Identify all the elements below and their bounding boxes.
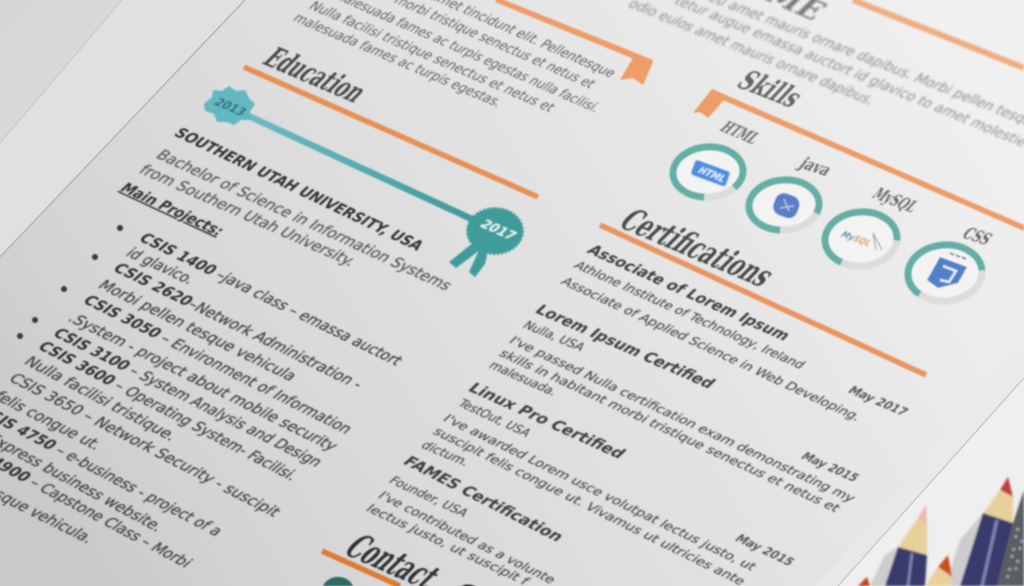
skill: HTML: HTML [715, 118, 764, 148]
badge: 2013 [204, 86, 255, 125]
pencil: orange tip [925, 555, 952, 586]
text: university block: Bachelor of Science in Information Systems [152, 147, 456, 294]
skill: HTML: HTML [695, 165, 729, 184]
text: project list: CSIS 3650 – Network Security - suscipit [5, 371, 285, 520]
text: project list: Morbi pellen tesque vehicula [94, 277, 301, 384]
text: intro paragraph: Nulla facilisi tristique senectus et netus et [305, 0, 559, 115]
text: university block: SOUTHERN UTAH UNIVERSITY, USA [170, 125, 428, 254]
text: fames entry [363, 453, 568, 586]
text: project list: CSIS 2620–Network Administration - [109, 260, 367, 392]
text: associate entry [558, 242, 912, 423]
heading: skills: Skills [729, 66, 810, 114]
text: fames entry: FAMES Certification [399, 453, 568, 545]
text: linux entry: suscipit felis congue ut. Vivamus ut ultricies ante [430, 425, 750, 586]
text: university block: Main Projects: [116, 180, 228, 239]
panel: contact [322, 528, 490, 586]
text: linux entry: I've awarded Lorem usce volutpat lectus justo, ut [440, 412, 761, 573]
skill: MySQL [823, 185, 923, 268]
text: linux entry: TestOut, USA [454, 396, 535, 439]
skill: java: java [793, 154, 837, 180]
text: associate entry: Associate of Applied Science in Web Developing. [558, 275, 865, 423]
heading: certifications: Certifications [610, 203, 783, 294]
text: project list: CSIS 3050 – Environment of Information [79, 292, 357, 437]
text: project list: CSIS 3100 – System Analysis and Design [49, 325, 327, 470]
text: linux entry: Linux Pro Certified [464, 380, 630, 462]
pencil: dark dotted [997, 490, 1024, 586]
text: fames entry: Founder, USA [386, 474, 473, 519]
rule: education [244, 67, 538, 197]
panel: certifications [363, 203, 926, 586]
rule with flag: intro [495, 0, 653, 85]
panel: skills [671, 66, 1024, 304]
pencil: red tip [858, 577, 870, 586]
rule: contact [322, 551, 400, 586]
text: fames entry: I've contributed as a volunte [375, 489, 560, 586]
shadows [870, 513, 983, 586]
rule: about me [853, 0, 1024, 68]
text: lorem ipsum entry: I've passed Nulla certification exam demonstrating my [506, 334, 859, 504]
rule: certifications [600, 225, 926, 375]
text: intro paragraph: malesuada fames ac turpis egestas. [289, 11, 506, 110]
text: lorem ipsum entry: May 2015 [798, 449, 863, 484]
text: associate entry: Athlone Institute of Technology, Ireland [571, 258, 809, 371]
text: lorem ipsum entry: Nulla, USA [520, 318, 589, 354]
text: lorem ipsum entry: skills in habitant morbi tristique senectus et netus et [496, 347, 844, 514]
skill: MySQL: MySQL [867, 185, 923, 216]
text: project list: .System - project about mobile security [64, 310, 342, 454]
skill: HTML [671, 118, 764, 199]
timeline: 2013 to 2017 [204, 86, 523, 277]
skill: java [747, 154, 837, 232]
text: project list [0, 230, 407, 571]
text: project list: CSIS 1400 –java class – emassa auctort [135, 230, 407, 369]
text: project list: CSIS 3600 – Operating System- Facilisi. [34, 339, 302, 484]
skill: CSS: CSS [958, 224, 996, 249]
text: lorem ipsum entry: malesuada. [486, 358, 562, 398]
heading: education: Education [255, 43, 374, 109]
text: linux entry [418, 380, 798, 586]
badge: 2013: 2013 [211, 95, 250, 118]
skill: MySQL: MySQL [838, 230, 874, 249]
text: linux entry: May 2015 [732, 532, 798, 568]
skill: CSS [906, 224, 996, 304]
bullets [17, 225, 123, 339]
text: project list: Nulla facilisi tristique. [20, 354, 182, 444]
text: linux entry: dictum. [418, 438, 474, 468]
pencil: navy with red tip [960, 477, 1013, 586]
badge: 2017 with ribbon: 2017 [476, 217, 520, 243]
text: fames entry: lectus justo, ut suscipit f [363, 502, 534, 586]
pencils [858, 477, 1024, 586]
text: lorem ipsum entry [486, 302, 863, 514]
badge: 2017 with ribbon [449, 208, 523, 277]
text: university block: from Southern Utah University. [135, 162, 360, 269]
panel: about me (top right, out of focus) [624, 0, 1024, 150]
icon: contact circle [323, 577, 353, 586]
text: project list: id glavico. [122, 245, 199, 287]
pencil: navy with pink tip [885, 505, 927, 586]
text: lorem ipsum entry: Lorem Ipsum Certified [531, 302, 719, 392]
text: associate entry: May 2017 [845, 383, 912, 418]
text: associate entry: Associate of Lorem Ipsum [583, 242, 794, 344]
rule with flag: skills [693, 89, 1024, 231]
